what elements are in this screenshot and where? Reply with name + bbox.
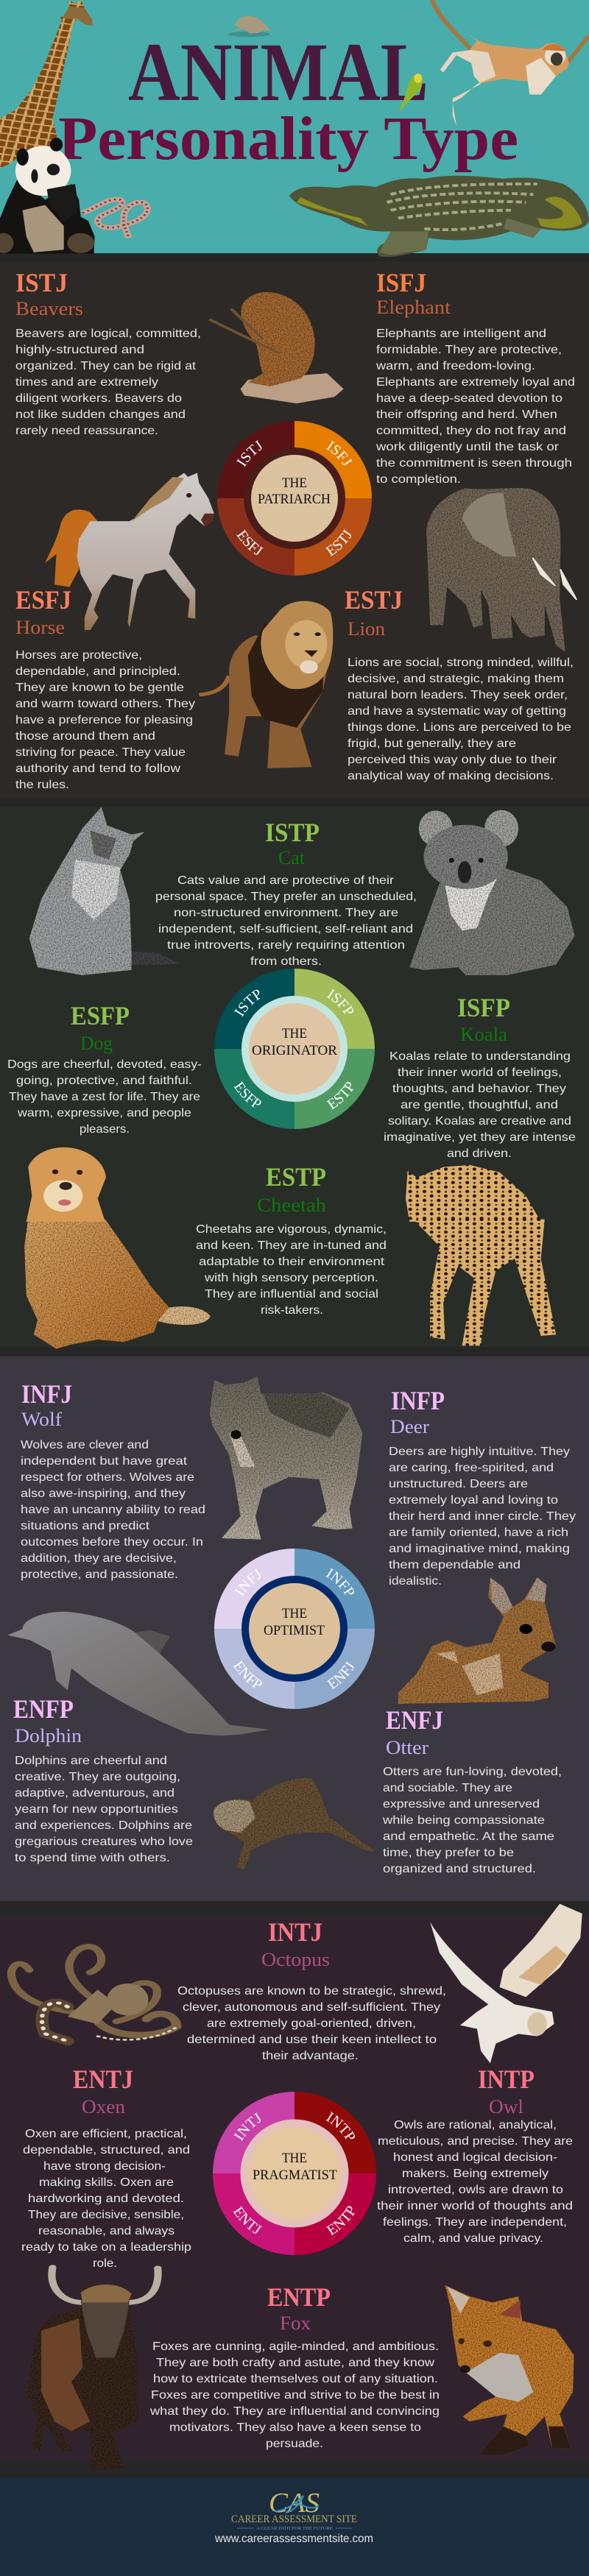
text: ENTJ description: reasonable, and always bbox=[38, 2225, 174, 2237]
text: ISTJ description: diligent workers. Beavers do bbox=[15, 392, 182, 405]
heading: ENFP bbox=[13, 1694, 82, 1747]
text: ENTP description: what they do. They are influential and convincing bbox=[149, 2405, 440, 2418]
icon: koala bbox=[409, 810, 575, 975]
text: INTP description: their inner world of thoughts and bbox=[377, 2200, 573, 2212]
text: ENFJ description: while being compassionate bbox=[382, 1814, 545, 1827]
heading: ENTJ bbox=[73, 2064, 133, 2117]
text: INFP description: and imaginative mind, making bbox=[389, 1543, 570, 1555]
chart: originator wheel: ISFP bbox=[327, 988, 353, 1014]
chart: patriarch wheel bbox=[217, 421, 372, 576]
panel: header background bbox=[0, 0, 589, 253]
text: ISFP description: imaginative, yet they are intense bbox=[384, 1131, 576, 1144]
heading: INFP: Deer bbox=[390, 1416, 429, 1437]
section: the patriarch bbox=[15, 268, 577, 791]
heading: ESFP: ESFP bbox=[71, 1001, 130, 1030]
text: ISTP description: from others. bbox=[250, 955, 322, 968]
heading: ISFJ: Elephant bbox=[376, 297, 451, 318]
text: INTJ description: determined and use their keen intellect to bbox=[187, 2034, 437, 2046]
text: INFP description: are caring, free-spirited, and bbox=[389, 1462, 554, 1474]
text: ISTP description: Cats value and are protective of their bbox=[177, 874, 395, 887]
text: INFP description: idealistic. bbox=[389, 1575, 442, 1588]
text: ENFP description: gregarious creatures who love bbox=[15, 1836, 193, 1848]
text: ESFJ description: They are known to be gentle bbox=[15, 682, 184, 694]
text: INFJ description: addition, they are decisive, bbox=[21, 1552, 177, 1565]
heading: ENFP: Dolphin bbox=[15, 1725, 82, 1747]
title: ANIMAL: ANIMAL bbox=[128, 26, 428, 118]
heading: ISFP: Koala bbox=[460, 1024, 507, 1045]
text: ESTP description: Cheetahs are vigorous, dynamic, bbox=[196, 1223, 387, 1236]
text: ISTP description: personal space. They prefer an unscheduled, bbox=[155, 891, 417, 903]
heading: INTJ: Octopus bbox=[261, 1949, 330, 1970]
chart: patriarch wheel: THE bbox=[282, 475, 307, 491]
text: ISFP description: Koalas relate to understanding bbox=[389, 1050, 571, 1063]
text: ISFJ description: Elephants are extremely loyal and bbox=[376, 376, 575, 389]
icon: owl bbox=[430, 1904, 582, 2063]
text: ESFP description: going, protective, and faithful. bbox=[16, 1075, 192, 1087]
text: ISTJ description: rarely need reassurance. bbox=[15, 425, 158, 437]
text: ENFJ description: organized and structured. bbox=[383, 1863, 536, 1875]
icon: golden retriever dog bbox=[24, 1147, 211, 1349]
band: optimist divider bbox=[0, 1347, 589, 1356]
text: ISFP description bbox=[384, 1050, 576, 1160]
text: ENFJ description: and sociable. They are bbox=[383, 1782, 512, 1794]
panel: patriarch background bbox=[0, 253, 589, 798]
panel: footer background bbox=[0, 2477, 589, 2576]
text: ISTJ description bbox=[15, 328, 201, 437]
text: INTP description: honest and logical decision- bbox=[393, 2151, 557, 2164]
icon: yak oxen bbox=[27, 2268, 158, 2469]
heading: INFP bbox=[390, 1386, 445, 1437]
text: INTP description: calm, and value privacy. bbox=[403, 2232, 543, 2245]
text: INTJ description: clever, autonomous and self-sufficient. They bbox=[183, 2001, 440, 2014]
icon: fox bbox=[445, 2285, 574, 2455]
chart: optimist wheel bbox=[214, 1549, 375, 1709]
text: ENTP description: how to extricate themselves out of any situation. bbox=[153, 2373, 438, 2385]
text: ENTP description: They are both crafty and astute, and they know bbox=[156, 2357, 435, 2369]
text: ESTP description: and keen. They are in-tuned and bbox=[196, 1239, 387, 1252]
heading: ESTP bbox=[257, 1162, 326, 1216]
text: ENTJ description: have strong decision- bbox=[43, 2160, 166, 2173]
text: ESTP description: with high sensory perception. bbox=[204, 1272, 378, 1284]
text: ENFP description: and experiences. Dolphins are bbox=[15, 1819, 192, 1832]
section: the optimist bbox=[7, 1376, 576, 1875]
heading: ESFP: Dog bbox=[80, 1033, 113, 1054]
footer: logo and website bbox=[214, 2488, 373, 2545]
heading: ENFJ: Otter bbox=[386, 1737, 428, 1758]
text: ENTP description: Foxes are competitive and strive to be the best in bbox=[151, 2389, 440, 2402]
chart: pragmatist wheel bbox=[213, 2092, 376, 2255]
text: ISFP description: are gentle, thoughtful, and bbox=[401, 1099, 558, 1111]
heading: ESTJ: ESTJ bbox=[345, 585, 403, 615]
section: the pragmatist bbox=[7, 1903, 582, 2469]
heading: ISTP: ISTP bbox=[265, 818, 320, 847]
icon: otter bbox=[214, 1778, 375, 1869]
text: ISFP description: and driven. bbox=[447, 1147, 512, 1160]
icon: snake bbox=[82, 199, 147, 238]
heading: ISTP: Cat bbox=[278, 847, 306, 868]
text: INTP description: introverted, owls are drawn to bbox=[388, 2184, 563, 2196]
heading: ENTJ: Oxen bbox=[82, 2096, 125, 2117]
text: ESTJ description bbox=[348, 657, 574, 782]
heading: ISTJ bbox=[15, 268, 83, 319]
heading: ISTJ: Beavers bbox=[15, 298, 83, 319]
text: ESTP description bbox=[196, 1223, 387, 1317]
header group bbox=[0, 0, 589, 257]
text: INFJ description: independent but have great bbox=[21, 1455, 188, 1468]
heading: ENTP bbox=[267, 2282, 331, 2334]
text: INFJ description: respect for others. Wolves are bbox=[21, 1471, 194, 1484]
text: ESFJ description: striving for peace. They value bbox=[15, 746, 186, 759]
band: originator top divider bbox=[0, 798, 589, 807]
text: ENTJ description: hardworking and devoted. bbox=[28, 2193, 184, 2205]
chart: patriarch wheel: ESFJ bbox=[236, 529, 264, 555]
text: INTJ description bbox=[177, 1985, 446, 2062]
logo: CAS: CAS bbox=[269, 2488, 320, 2519]
section: the originator bbox=[7, 807, 576, 1349]
text: ISTJ description: highly-structured and bbox=[15, 344, 144, 356]
chart: originator wheel bbox=[214, 969, 375, 1129]
text: INTP description: makers. Being extremely bbox=[402, 2168, 549, 2180]
icon: parakeet bbox=[398, 74, 423, 113]
heading: INFJ: Wolf bbox=[21, 1409, 62, 1430]
heading: ENTP: Fox bbox=[280, 2313, 311, 2334]
chart: patriarch wheel: PATRIARCH bbox=[258, 492, 331, 507]
chart: pragmatist wheel: ENTP bbox=[325, 2206, 355, 2236]
text: INFP description: are family oriented, have a rich bbox=[389, 1526, 568, 1539]
logo: CAS: A CLEAR PATH FOR THE FUTURE bbox=[256, 2527, 333, 2531]
icon: dolphin bbox=[7, 1612, 269, 1735]
text: ESTJ description: analytical way of making decisions. bbox=[348, 770, 554, 782]
text: ESFJ description: and warm toward others. They bbox=[15, 698, 195, 710]
text: INFJ description: protective, and passionate. bbox=[21, 1568, 178, 1581]
band: pragmatist divider bbox=[0, 1901, 589, 1917]
chart: originator wheel: ORIGINATOR bbox=[252, 1043, 337, 1058]
heading: INTP: INTP bbox=[478, 2064, 535, 2094]
text: ESFJ description: have a preference for pleasing bbox=[15, 714, 193, 726]
text: ENTJ description: making skills. Oxen are bbox=[39, 2176, 174, 2189]
text: INTP description: feelings. They are independent, bbox=[383, 2216, 567, 2229]
text: ISFJ description: the commitment is seen through bbox=[376, 457, 572, 470]
text: ESFP description: They have a zest for life. They are bbox=[9, 1091, 200, 1103]
text: ENTP description bbox=[149, 2340, 440, 2450]
chart: patriarch wheel: ESTJ bbox=[325, 528, 351, 556]
text: ESTP description: risk-takers. bbox=[261, 1304, 323, 1317]
chart: originator wheel: ESTP bbox=[326, 1082, 353, 1110]
heading: ENFJ bbox=[386, 1705, 443, 1758]
icon: lion bbox=[199, 601, 333, 768]
text: INFJ description: outcomes before they occur. In bbox=[21, 1536, 203, 1549]
chart: optimist wheel: THE bbox=[282, 1606, 307, 1621]
text: ENFP description: adaptive, adventurous, and bbox=[15, 1787, 174, 1800]
heading: ISTP bbox=[265, 818, 320, 868]
heading: INTJ bbox=[261, 1917, 330, 1970]
text: ESTP description: They are influential and social bbox=[205, 1288, 378, 1301]
text: INFJ description: have an uncanny ability to read bbox=[21, 1504, 205, 1516]
chart: pragmatist wheel: INTP bbox=[325, 2112, 355, 2140]
icon: crocodile bbox=[289, 176, 589, 257]
text: website url: www.careerassessmentsite.com bbox=[214, 2533, 373, 2545]
text: ISFP description: thoughts, and behavior. They bbox=[392, 1083, 566, 1095]
icon: horse bbox=[45, 473, 214, 630]
icon: beaver bbox=[209, 292, 344, 403]
text: ISTP description bbox=[155, 874, 417, 968]
heading: ISFJ bbox=[376, 268, 451, 318]
text: ENTJ description bbox=[21, 2128, 191, 2270]
text: INTP description bbox=[377, 2119, 573, 2245]
text: INFP description: their herd and inner circle. They bbox=[389, 1510, 576, 1523]
chart: originator wheel: ISTP bbox=[234, 989, 261, 1017]
text: ISFJ description: warm, and freedom-loving. bbox=[375, 360, 535, 372]
chart: pragmatist wheel: PRAGMATIST bbox=[253, 2168, 337, 2183]
text: ESFP description: pleasers. bbox=[80, 1123, 130, 1136]
logo: CAS: CAREER ASSESSMENT SITE bbox=[231, 2513, 357, 2525]
icon: wolf bbox=[210, 1376, 362, 1540]
text: ESFJ description: those around them and bbox=[15, 730, 155, 743]
chart: optimist wheel: INFP bbox=[325, 1568, 354, 1596]
band: patriarch divider bbox=[0, 253, 589, 261]
text: ISFJ description: have a deep-seated devotion to bbox=[376, 392, 562, 405]
text: INFJ description bbox=[21, 1439, 205, 1581]
icon: octopus bbox=[11, 1947, 177, 2041]
text: INTP description: meticulous, and precise. They are bbox=[378, 2135, 573, 2148]
text: ISTJ description: not like sudden changes and bbox=[15, 408, 186, 421]
icon: monkey bbox=[432, 0, 589, 126]
chart: pragmatist wheel: ENTJ bbox=[233, 2206, 262, 2233]
text: ESTJ description: things done. Lions are perceived to be bbox=[348, 721, 571, 734]
text: INFP description: them dependable and bbox=[389, 1559, 521, 1571]
text: ENTJ description: They are decisive, sensible, bbox=[28, 2209, 184, 2221]
panel: optimist background bbox=[0, 1356, 589, 1901]
heading: INFJ bbox=[21, 1379, 72, 1430]
heading: ESTJ bbox=[345, 585, 403, 640]
heading: ESFJ: Horse bbox=[15, 617, 65, 638]
text: ENFJ description: and empathetic. At the same bbox=[383, 1830, 554, 1843]
text: ISTP description: non-structured environment. They are bbox=[174, 907, 398, 919]
chart: optimist wheel: ENFJ bbox=[327, 1660, 353, 1690]
chart: patriarch wheel: ISFJ bbox=[325, 440, 352, 465]
text: ISFJ description: to completion. bbox=[376, 473, 461, 486]
text: ESTJ description: perceived this way only due to their bbox=[348, 754, 557, 766]
chart: pragmatist wheel: THE bbox=[282, 2151, 307, 2166]
text: ENTJ description: role. bbox=[93, 2257, 117, 2270]
text: ESFJ description: the rules. bbox=[15, 779, 69, 791]
band: footer divider bbox=[0, 2460, 589, 2477]
text: ISTJ description: times and are extremely bbox=[15, 376, 158, 389]
text: ISFJ description bbox=[375, 328, 575, 486]
text: ESFJ description: Horses are protective, bbox=[15, 649, 142, 662]
text: ISTJ description: organized. They can be rigid at bbox=[15, 360, 197, 372]
text: ISFP description: solitary. Koalas are creative and bbox=[388, 1115, 571, 1128]
text: ESTJ description: frigid, but generally, they are bbox=[348, 737, 516, 750]
text: INTJ description: their advantage. bbox=[262, 2050, 359, 2062]
icon: giraffe bbox=[0, 0, 94, 169]
text: INFP description bbox=[389, 1446, 576, 1588]
text: ESFJ description: dependable, and principled. bbox=[15, 665, 180, 678]
heading: ESTJ: Lion bbox=[348, 618, 385, 640]
text: ENFP description: Dolphins are cheerful and bbox=[15, 1755, 167, 1767]
text: ESFP description bbox=[7, 1058, 202, 1136]
heading: ENFP: ENFP bbox=[13, 1694, 74, 1724]
heading: ENTP: ENTP bbox=[267, 2282, 331, 2312]
text: ESTP description: adaptable to their environment bbox=[199, 1256, 385, 1268]
text: ENFP description: creative. They are outgoing, bbox=[15, 1771, 180, 1783]
chart: optimist wheel: INFJ bbox=[234, 1568, 261, 1597]
chart: pragmatist wheel: INTJ bbox=[233, 2112, 261, 2142]
text: ENTJ description: ready to take on a leadership bbox=[21, 2241, 191, 2254]
text: ENTP description: persuade. bbox=[266, 2438, 323, 2450]
text: ENTP description: Foxes are cunning, agile-minded, and ambitious. bbox=[152, 2340, 439, 2353]
panel: pragmatist background bbox=[0, 1917, 589, 2460]
heading: ESFP bbox=[71, 1001, 130, 1054]
text: INFJ description: also awe-inspiring, and they bbox=[21, 1487, 186, 1500]
heading: ESTP: Cheetah bbox=[257, 1195, 326, 1216]
text: INTJ description: are extremely goal-oriented, driven, bbox=[207, 2017, 416, 2030]
icon: chameleon bbox=[228, 16, 270, 37]
text: INTJ description: Octopuses are known to be strategic, shrewd, bbox=[177, 1985, 446, 1998]
text: ENFJ description: time, they prefer to be bbox=[383, 1847, 514, 1859]
heading: INTP bbox=[478, 2064, 535, 2117]
chart: patriarch wheel: ISTJ bbox=[236, 440, 262, 467]
text: ENFJ description: Otters are fun-loving, devoted, bbox=[383, 1766, 562, 1778]
logo: CAS bbox=[231, 2488, 357, 2531]
text: ISTP description: independent, self-sufficient, self-reliant and bbox=[158, 923, 413, 935]
icon: elephant bbox=[426, 488, 576, 651]
icon: deer bbox=[398, 1577, 556, 1704]
text: ESTJ description: decisive, and strategic, making them bbox=[348, 673, 564, 685]
heading: ISFJ: ISFJ bbox=[376, 268, 426, 297]
text: ENTJ description: Oxen are efficient, practical, bbox=[25, 2128, 187, 2140]
text: ENFJ description: expressive and unreserved bbox=[383, 1798, 540, 1811]
text: ESFP description: Dogs are cheerful, devoted, easy- bbox=[7, 1058, 202, 1071]
text: ISFJ description: formidable. They are protective, bbox=[376, 344, 562, 356]
heading: ENTJ: ENTJ bbox=[73, 2064, 133, 2094]
icon: panda bbox=[0, 138, 95, 254]
text: ESTJ description: and have a systematic way of getting bbox=[348, 705, 566, 718]
heading: INFJ: INFJ bbox=[21, 1379, 72, 1409]
text: INFP description: unstructured. Deers are bbox=[389, 1478, 528, 1490]
heading: INTP: Owl bbox=[489, 2096, 523, 2117]
heading: ISTJ: ISTJ bbox=[15, 268, 68, 297]
text: ESTJ description: natural born leaders. They seek order, bbox=[348, 689, 568, 701]
heading: ESFJ: ESFJ bbox=[15, 585, 71, 615]
text: ISTJ description: Beavers are logical, committed, bbox=[15, 328, 201, 340]
text: INFJ description: situations and predict bbox=[21, 1520, 150, 1532]
text: ISFJ description: Elephants are intelligent and bbox=[376, 328, 546, 340]
chart: originator wheel: THE bbox=[282, 1026, 307, 1041]
text: ENFP description: to spend time with others. bbox=[15, 1852, 170, 1864]
text: ESTJ description: Lions are social, strong minded, willful, bbox=[348, 657, 574, 669]
heading: ENFJ: ENFJ bbox=[386, 1705, 443, 1735]
heading: ISFP bbox=[457, 993, 510, 1045]
chart: originator wheel: ESFP bbox=[234, 1080, 261, 1108]
text: ENFP description bbox=[15, 1755, 193, 1864]
heading: ESFJ bbox=[15, 585, 71, 638]
text: ESFJ description: authority and tend to follow bbox=[15, 762, 181, 775]
text: ENFJ description bbox=[382, 1766, 562, 1875]
title: Personality Type: Personality Type bbox=[58, 105, 518, 173]
text: ISFJ description: their offspring and herd. When bbox=[376, 408, 557, 421]
heading: ISFP: ISFP bbox=[457, 993, 510, 1022]
heading: ESTP: ESTP bbox=[266, 1162, 326, 1192]
heading: INFP: INFP bbox=[391, 1386, 445, 1415]
icon: cat bbox=[29, 807, 180, 975]
text: ENTJ description: dependable, structured, and bbox=[23, 2144, 190, 2156]
text: ESFP description: warm, expressive, and people bbox=[17, 1107, 191, 1119]
text: ESFJ description bbox=[15, 649, 195, 791]
chart: optimist wheel: ENFP bbox=[233, 1660, 262, 1688]
heading: INTJ: INTJ bbox=[268, 1917, 322, 1947]
chart: optimist wheel: OPTIMIST bbox=[264, 1623, 325, 1638]
text: ISTP description: true introverts, rarely requiring attention bbox=[167, 939, 405, 952]
text: INFP description: Deers are highly intuitive. They bbox=[389, 1446, 570, 1458]
text: ISFJ description: committed, they do not fray and bbox=[376, 425, 566, 437]
text: INFP description: extremely loyal and loving to bbox=[389, 1494, 558, 1507]
icon: cheetah bbox=[406, 1165, 556, 1345]
text: ISFJ description: work diligently until the task or bbox=[375, 441, 560, 453]
text: INFJ description: Wolves are clever and bbox=[21, 1439, 149, 1451]
text: ENTP description: motivators. They also have a keen sense to bbox=[169, 2421, 421, 2434]
panel: originator background bbox=[0, 798, 589, 1347]
text: ISFP description: their inner world of feelings, bbox=[398, 1066, 562, 1079]
text: INTP description: Owls are rational, analytical, bbox=[394, 2119, 557, 2131]
text: ENFP description: yearn for new opportunities bbox=[15, 1803, 178, 1816]
